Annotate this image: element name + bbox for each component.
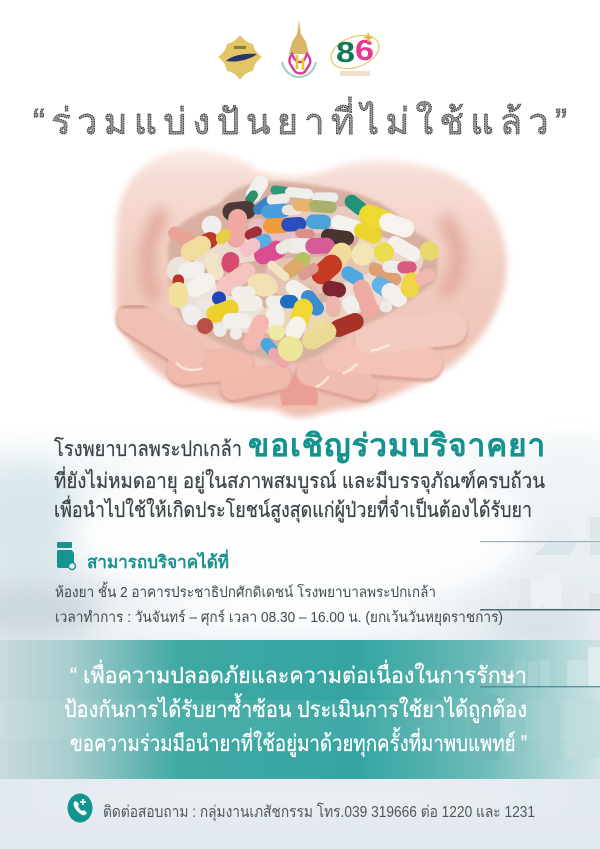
band: teal quote background (0, 640, 600, 779)
palm shading (147, 217, 458, 293)
quote text (64, 659, 527, 757)
fingers (133, 317, 450, 397)
shelf bottles: middle right (480, 574, 600, 610)
invitation text block (54, 428, 545, 523)
shelf bottles: upper right (480, 513, 600, 555)
title: “ร่วมแบ่งปันยาที่ไม่ใช้แล้ว” (33, 97, 567, 142)
nails (177, 345, 388, 387)
donation location (55, 549, 503, 626)
location heading: สามารถบริจาคได้ที่ (87, 549, 229, 572)
line three: เพื่อนำไปใช้ให้เกิดประโยชน์สูงสุดแก่ผู้ป่วยที่จำเป็นต้องได้รับยา (54, 495, 532, 523)
location address: ห้องยา ชั้น 2 อาคารประชาธิปกศักดิเดชน์ โรงพยาบาลพระปกเกล้า (55, 581, 436, 601)
hands base (115, 150, 507, 417)
shelf bottles: in teal band (470, 647, 600, 760)
pile shadow (168, 181, 438, 364)
office hours: เวลาทำการ : วันจันทร์ – ศุกร์ เวลา 08.30 – 16.00 น. (ยกเว้นวันหยุดราชการ) (55, 609, 503, 626)
logo: 86 anniversary: 8 (336, 37, 355, 69)
logo: gold emblem (218, 35, 262, 80)
logo: hospital crest (282, 20, 316, 77)
icon: phone (68, 794, 92, 822)
blurred pharmacy background (0, 440, 600, 807)
pills (175, 183, 439, 363)
highlighted heading: ขอเชิญร่วมบริจาคยา (248, 428, 545, 464)
photo: hands holding pills (115, 150, 507, 417)
line two: ที่ยังไม่หมดอายุ อยู่ในสภาพสมบูรณ์ และมีบรรจุภัณฑ์ครบถ้วน (54, 466, 545, 494)
quote text: ป้องกันการได้รับยาซ้ำซ้อน ประเมินการใช้ยาได้ถูกต้อง (64, 693, 527, 723)
logo: 86 anniversary: 6 (355, 35, 374, 67)
logo: 86 anniversary (326, 29, 384, 76)
contact line: ติดต่อสอบถาม : กลุ่มงานเภสัชกรรม โทร.039 319666 ต่อ 1220 และ 1231 (103, 802, 535, 822)
logos (218, 20, 384, 80)
filler pills (180, 220, 410, 320)
quote text: “ เพื่อความปลอดภัยและความต่อเนื่องในการรักษา (70, 659, 527, 688)
intro line: โรงพยาบาลพระปกเกล้า (54, 437, 242, 461)
icon: medicine bottle (57, 542, 76, 570)
